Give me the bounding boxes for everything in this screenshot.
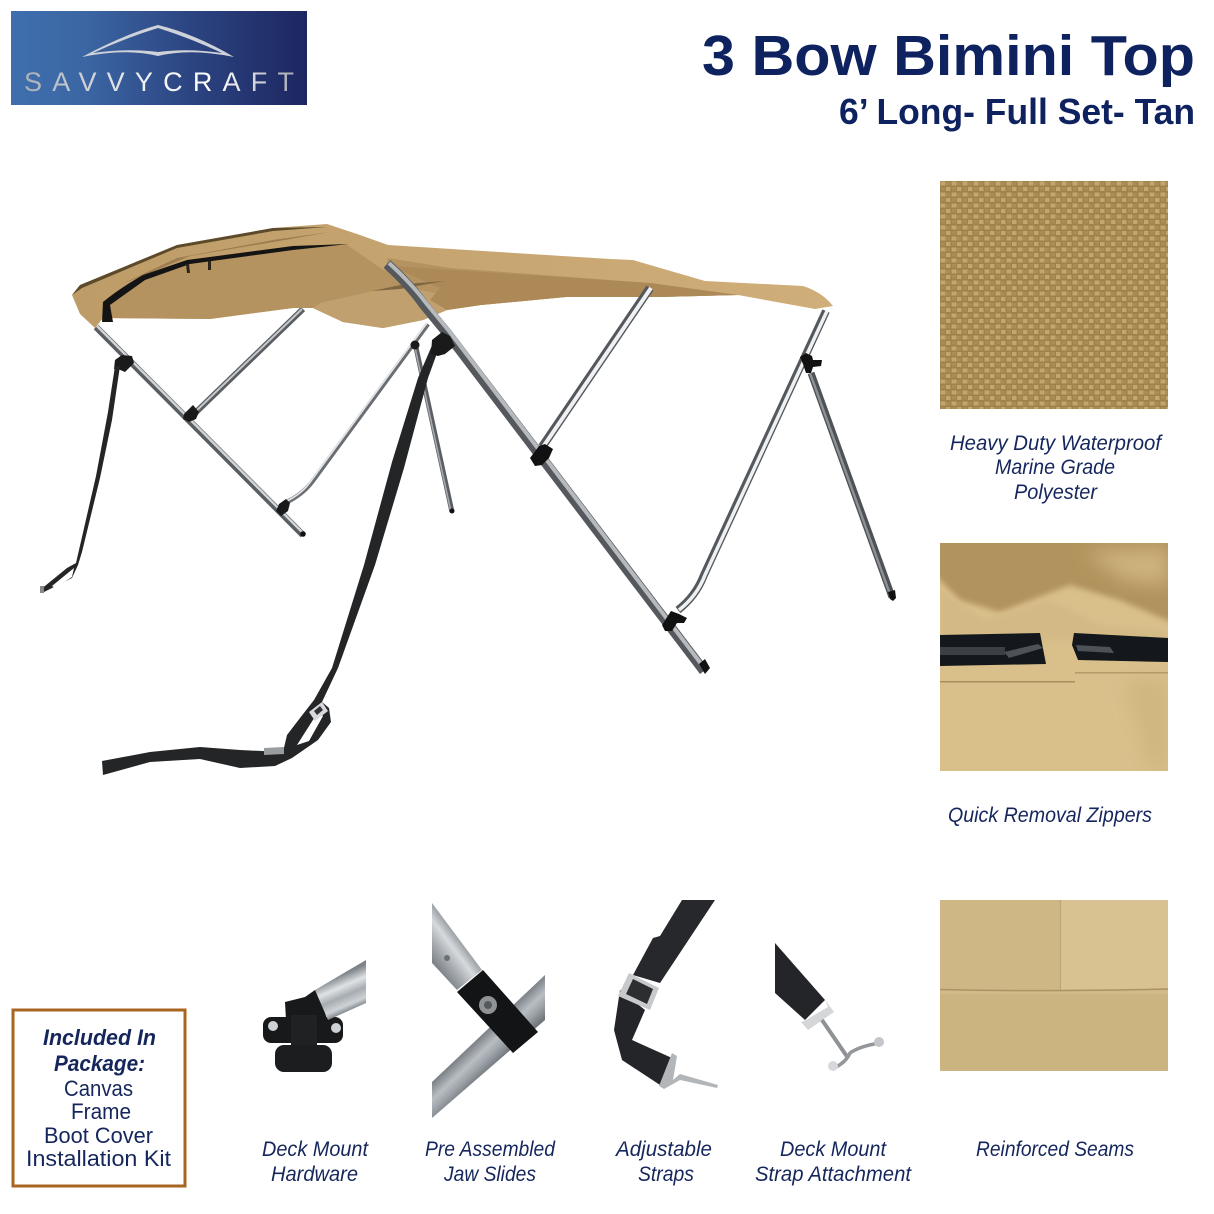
- canopy: underside: [103, 245, 738, 328]
- caption: adjustable straps: Adjustable: [614, 1138, 712, 1161]
- caption: polyester: [950, 432, 1163, 504]
- caption: strap attachment: Strap Attachment: [755, 1163, 912, 1186]
- product photo: bimini top: [40, 224, 896, 775]
- caption: jaw slides: Pre Assembled: [425, 1138, 556, 1161]
- icon: canopy roof mark: [82, 25, 234, 57]
- fabric photo: quick removal zippers: [940, 543, 1168, 826]
- caption: polyester: Polyester: [1014, 481, 1098, 504]
- caption: strap attachment: Deck Mount: [780, 1138, 887, 1161]
- title: 3 Bow Bimini Top: [702, 24, 1195, 88]
- caption: polyester: Marine Grade: [995, 456, 1115, 479]
- caption: deck mount hardware: [262, 1138, 369, 1186]
- caption: jaw slides: [425, 1138, 556, 1186]
- caption: deck mount hardware: Hardware: [271, 1163, 358, 1186]
- detail: deck mount strap attachment: [755, 943, 912, 1186]
- strap: left: [40, 366, 120, 593]
- detail: pre assembled jaw slides: [425, 903, 556, 1186]
- fabric photo: reinforced seams: [940, 900, 1168, 1161]
- fabric swatch: polyester weave: [940, 181, 1168, 504]
- caption: adjustable straps: [614, 1138, 712, 1186]
- caption: jaw slides: Jaw Slides: [443, 1163, 536, 1186]
- caption: zippers: Quick Removal Zippers: [948, 804, 1152, 827]
- detail: adjustable straps: [614, 900, 718, 1186]
- caption: deck mount hardware: Deck Mount: [262, 1138, 369, 1161]
- callout: included in package: Canvas: [64, 1076, 133, 1101]
- title: [702, 24, 1195, 132]
- zipper right: [1072, 633, 1168, 662]
- logo: Savvycraft: SAVVYCRAFT: [24, 67, 294, 97]
- callout: included in package: Included In: [43, 1025, 156, 1050]
- callout: included in package: Frame: [71, 1099, 131, 1124]
- callout: included in package: Installation Kit: [26, 1146, 171, 1171]
- canopy: [72, 224, 833, 328]
- caption: strap attachment: [755, 1138, 912, 1186]
- callout: included in package: [13, 1010, 185, 1186]
- far rod and strap frame parts: [96, 309, 454, 537]
- subtitle: 6’ Long- Full Set- Tan: [839, 91, 1195, 132]
- logo: Savvycraft: [11, 11, 307, 105]
- callout: included in package: Package:: [54, 1051, 145, 1076]
- caption: polyester: Heavy Duty Waterproof: [950, 432, 1163, 455]
- zipper left: [940, 633, 1046, 666]
- caption: adjustable straps: Straps: [638, 1163, 694, 1186]
- callout: included in package: Boot Cover: [44, 1123, 153, 1148]
- strap: long: [102, 343, 440, 775]
- detail: deck mount hardware: [262, 960, 369, 1186]
- caption: seams: Reinforced Seams: [976, 1138, 1134, 1161]
- front main frame: [387, 263, 896, 674]
